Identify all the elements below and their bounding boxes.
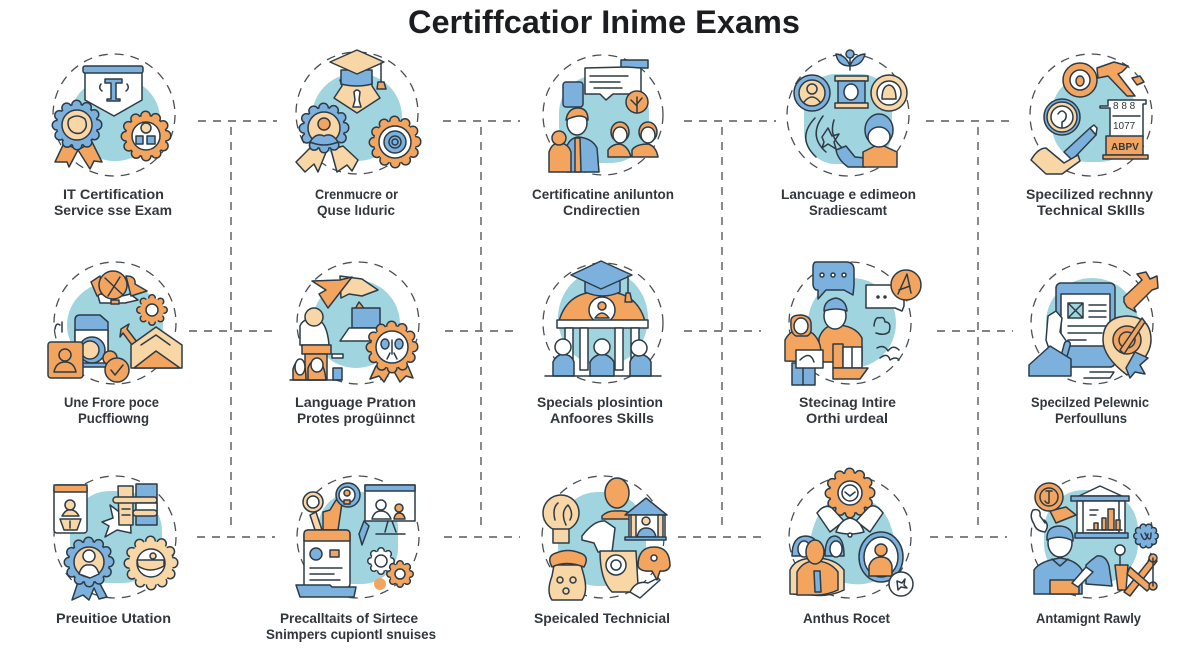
panel: Anthus Rocet xyxy=(789,473,913,626)
icon: gear, hands and people xyxy=(789,473,913,598)
label xyxy=(781,186,916,218)
label xyxy=(799,394,896,426)
label: Technical SkIlls xyxy=(1037,202,1145,218)
icon: banner and badges xyxy=(53,54,175,176)
label xyxy=(64,394,159,426)
label xyxy=(266,610,436,642)
icon: university building xyxy=(543,261,663,383)
label: Orthi urdeal xyxy=(806,410,888,426)
dashed connector lines xyxy=(189,121,1016,537)
label: Snimpers cupiontl snuises xyxy=(266,626,436,642)
icon: document and professionals xyxy=(543,55,663,175)
label: Specials plosintion xyxy=(537,394,663,410)
label: Protes progüinnct xyxy=(297,410,415,426)
label xyxy=(1031,394,1149,426)
panel: Crenmucre or xyxy=(296,50,418,218)
panel: Lancuage e edimeon xyxy=(781,50,916,218)
icon: key, calendar and pen: 8 8 8 xyxy=(1113,101,1136,112)
label: Anthus Rocet xyxy=(803,610,890,626)
label: Pucffiowng xyxy=(78,410,149,426)
icon: key, calendar and pen: 1077 xyxy=(1113,121,1136,132)
label xyxy=(1026,186,1153,218)
label xyxy=(532,186,674,218)
label: Une Frore poce xyxy=(64,394,159,410)
label: Specilized rechnny xyxy=(1026,186,1153,202)
panel: Preuitioe Utation xyxy=(54,476,176,626)
label: Anfoores Skills xyxy=(550,410,654,426)
icon: plant trophy and person xyxy=(787,50,909,176)
icon: globe, gear, envelope and card xyxy=(48,262,182,384)
label: Perfoulluns xyxy=(1055,410,1127,426)
label: Service sse Exam xyxy=(54,202,172,218)
label xyxy=(315,186,398,218)
panel: Language Pratıon xyxy=(290,262,419,426)
label: Lancuage e edimeon xyxy=(781,186,916,202)
label: Certificatine anilunton xyxy=(532,186,674,202)
title: Certiffcatior Inime Exams xyxy=(408,4,800,40)
icon: graduation cap and badges xyxy=(296,50,418,174)
panel: Stecinag Intire xyxy=(785,262,921,426)
panel: Specials plosintion xyxy=(537,261,663,426)
label: Cndirectien xyxy=(563,202,640,218)
panel: Precalltaits of Sirtece xyxy=(266,476,436,642)
label: Stecinag Intire xyxy=(799,394,896,410)
icon: bulb, jar, person and house xyxy=(542,476,670,600)
label: Antamignt Rawly xyxy=(1036,610,1141,626)
panel: Une Frore poce xyxy=(48,262,182,426)
icon: bank chart and analysts xyxy=(1031,476,1157,598)
icon: ID card, scroll and badges xyxy=(54,476,176,600)
label: Language Pratıon xyxy=(295,394,416,410)
panel: Specilzed Pelewnic xyxy=(1029,262,1158,426)
label: Crenmucre or xyxy=(315,186,398,202)
label xyxy=(537,394,663,426)
label: Quse lıduric xyxy=(317,202,395,218)
label: Specilzed Pelewnic xyxy=(1031,394,1149,410)
icon: report, monitor and gears xyxy=(296,476,419,598)
panel: IT certification xyxy=(53,54,175,218)
icon: key, calendar and pen: ABPV xyxy=(1111,142,1139,153)
icon: key, calendar and pen xyxy=(1030,54,1152,176)
label: Sradiescamt xyxy=(809,202,887,218)
icon: tablet document and medal xyxy=(1029,262,1158,384)
icon: two people and speech bubbles xyxy=(785,262,921,385)
panel: Speicaled Technicial xyxy=(534,476,670,626)
panel: Antamignt Rawly xyxy=(1031,476,1157,626)
label: Precalltaits of Sirtece xyxy=(280,610,418,626)
panel: Certificatine anilunton xyxy=(532,55,674,218)
icon: flag, speaker and badge xyxy=(290,262,419,384)
label: Speicaled Technicial xyxy=(534,610,670,626)
label xyxy=(54,186,172,218)
panel: Specilized rechnny xyxy=(1026,54,1153,218)
label: IT Certification xyxy=(63,186,164,202)
label: Preuitioe Utation xyxy=(56,610,171,626)
label xyxy=(295,394,416,426)
